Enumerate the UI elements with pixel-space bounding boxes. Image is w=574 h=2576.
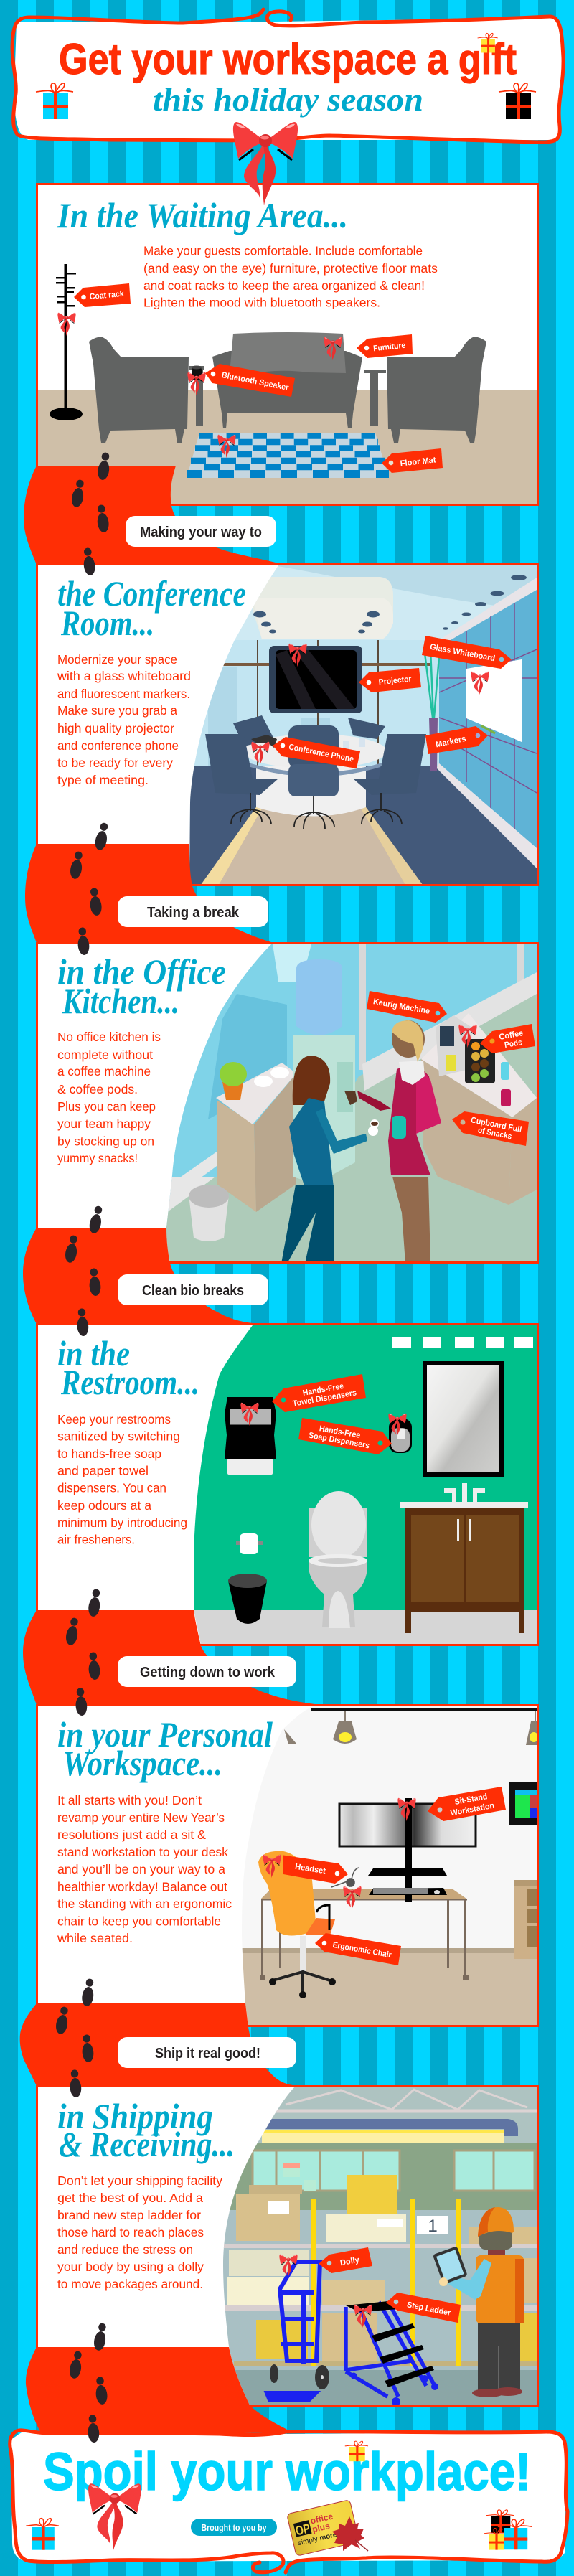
dolly wheels <box>270 2364 329 2389</box>
tag: markers: Markers <box>435 735 467 749</box>
text block: personal workspace: It all starts with you! Don’t <box>57 1793 202 1808</box>
aisle number sign <box>417 2216 448 2236</box>
heading: personal workspace <box>57 1714 273 1783</box>
label: taking a break: Taking a break <box>147 905 240 921</box>
icon: blue gift <box>26 2519 59 2550</box>
tag: sit-stand workstation <box>428 1787 506 1821</box>
heading: office kitchen: in the Office <box>57 951 226 992</box>
text block: shipping and receiving: get the best of you. Add a <box>57 2191 203 2205</box>
monitor <box>339 1804 476 1846</box>
illustration: office kitchen <box>165 943 538 1264</box>
soap dispenser <box>389 1419 412 1453</box>
tag: sit-stand workstation: Sit-Stand <box>454 1792 488 1807</box>
tag: cupboard full of snacks <box>452 1111 529 1146</box>
icon: bluetooth speaker <box>192 366 202 380</box>
label: getting down to work: Getting down to work <box>140 1665 276 1680</box>
tag: glass whiteboard <box>422 636 512 669</box>
pill: brought to you by <box>191 2519 277 2536</box>
side tables <box>189 366 386 426</box>
text block: personal workspace: the standing with an ergonomic <box>57 1896 232 1911</box>
text block: office kitchen: & coffee pods. <box>57 1082 138 1096</box>
icon: blue gift <box>36 83 73 119</box>
text block: shipping and receiving: those hard to reach places <box>57 2225 204 2239</box>
border: office kitchen <box>37 943 538 1263</box>
towel dispenser <box>225 1397 276 1475</box>
tag: dolly <box>319 2247 372 2273</box>
icon: right armchair <box>387 337 486 443</box>
text block: shipping and receiving: Don’t let your shipping facility <box>57 2173 222 2188</box>
text block: personal workspace: revamp your entire New Year’s <box>57 1810 225 1825</box>
heading: conference room: the Conference <box>57 573 246 614</box>
icon: yellow gift <box>345 2441 368 2461</box>
red path 2 <box>25 844 271 943</box>
wall tiles <box>392 1337 533 1348</box>
border: restroom <box>37 1325 538 1645</box>
text block: conference room <box>57 652 191 787</box>
text block: office kitchen: a coffee machine <box>57 1064 151 1078</box>
tag: headset <box>283 1856 348 1884</box>
text block: restroom: keep odours at a <box>57 1498 151 1513</box>
bows: conference room <box>251 644 489 765</box>
bottom banner <box>10 2430 568 2572</box>
text block: personal workspace: stand workstation to your desk <box>57 1845 228 1859</box>
tag: coat rack <box>74 283 131 307</box>
icon: sofa <box>212 332 362 428</box>
tag: bluetooth speaker <box>205 364 295 397</box>
text block: restroom: to hands-free soap <box>57 1447 161 1461</box>
dolly <box>267 2262 320 2400</box>
heading: shipping and receiving <box>57 2096 235 2164</box>
headset <box>331 1868 359 1887</box>
tag: glass whiteboard: Glass Whiteboard <box>429 643 496 663</box>
text block: personal workspace: resolutions just add a sit & <box>57 1828 206 1842</box>
side cabinet <box>514 1880 538 1959</box>
tag: keurig machine: Keurig Machine <box>372 997 430 1016</box>
worker <box>433 2207 524 2397</box>
vase and plant <box>425 649 439 771</box>
tag: step ladder: Step Ladder <box>406 2300 452 2318</box>
icon: big bow on banner <box>233 122 298 205</box>
red path 6 <box>26 2347 293 2436</box>
coffee machine and pods <box>436 1015 511 1106</box>
tag: cupboard full of snacks: Cupboard Full <box>470 1116 522 1134</box>
pill: brought to you by: Brought to you by <box>201 2522 267 2533</box>
heading: office kitchen <box>57 951 226 1021</box>
text block: restroom <box>57 1412 187 1547</box>
tag: towel dispensers <box>272 1374 366 1412</box>
panel: conference room <box>37 564 538 885</box>
water cooler <box>293 959 355 1184</box>
illustration: shipping and receiving <box>215 2087 538 2406</box>
heading: restroom: Restroom... <box>60 1362 199 1402</box>
bow on speaker <box>187 372 206 395</box>
vanity <box>400 1483 528 1633</box>
text block: waiting area: Make your guests comfortable. Include comfortable <box>144 244 423 258</box>
text block: restroom: and paper towel <box>57 1464 149 1478</box>
bin <box>189 1185 229 1241</box>
right counter <box>421 1013 537 1205</box>
red path 5 <box>20 2003 293 2086</box>
border: personal workspace <box>37 1705 538 2026</box>
icon: floor mat <box>187 433 389 478</box>
text block: waiting area <box>144 244 438 310</box>
text block: conference room: and fluorescent markers. <box>57 687 190 701</box>
panel: office kitchen <box>37 943 538 1264</box>
top banner <box>12 9 563 142</box>
red path 4 <box>23 1610 315 1705</box>
text block: office kitchen: your team happy <box>57 1117 151 1131</box>
tag: towel dispensers: Hands-Free <box>302 1382 344 1398</box>
pendant lamps <box>284 1721 538 1745</box>
label: making your way to <box>126 516 276 547</box>
text block: personal workspace: and you’ll be on your way to a <box>57 1862 225 1876</box>
tag: markers <box>425 726 488 754</box>
text block: restroom: sanitized by switching <box>57 1429 180 1444</box>
heading: personal workspace: in your Personal <box>57 1714 273 1754</box>
text block: shipping and receiving: and reduce the stress on <box>57 2242 193 2257</box>
text block: conference room: Modernize your space <box>57 652 177 667</box>
bow on coffee machine <box>458 1025 477 1048</box>
label: clean bio breaks: Clean bio breaks <box>142 1283 244 1299</box>
label: clean bio breaks <box>118 1274 268 1305</box>
tag: sit-stand workstation: Workstation <box>450 1802 495 1818</box>
red path 3 <box>23 1228 253 1324</box>
ceiling rail <box>311 1708 538 1721</box>
tag: coat rack: Coat rack <box>89 290 125 301</box>
icon: gift stack <box>484 2510 532 2550</box>
text block: office kitchen <box>57 1030 161 1165</box>
heading: waiting area: In the Waiting Area... <box>57 195 348 235</box>
text block: conference room: type of meeting. <box>57 773 149 787</box>
label: making your way to: Making your way to <box>140 525 262 540</box>
aisle number sign: 1 <box>428 2217 438 2236</box>
text block: office kitchen: Plus you can keep <box>57 1099 156 1114</box>
woman in teal <box>281 1056 379 1264</box>
tag: conference phone <box>273 737 360 768</box>
text block: office kitchen: by stocking up on <box>57 1134 154 1148</box>
icon: conference phone <box>251 735 277 748</box>
bows: shipping and receiving <box>279 2255 372 2328</box>
text block: office kitchen: complete without <box>57 1048 153 1062</box>
panel: waiting area <box>37 184 538 505</box>
tag: soap dispensers: Hands-Free <box>319 1424 361 1440</box>
text block: restroom: air fresheners. <box>57 1533 135 1547</box>
tag: headset: Headset <box>294 1863 326 1876</box>
text block: conference room: and conference phone <box>57 738 179 753</box>
tag: furniture: Furniture <box>373 342 406 353</box>
woman in red dress <box>344 1020 441 1264</box>
panel: shipping and receiving <box>37 2087 538 2406</box>
heading: restroom: in the <box>57 1333 130 1373</box>
chairs <box>205 715 426 796</box>
heading: personal workspace: Workspace... <box>62 1743 222 1783</box>
pallet line <box>234 2361 538 2366</box>
logo: office plus: plus <box>311 2521 331 2534</box>
tag: soap dispensers <box>298 1418 392 1454</box>
icon: big bow on bottom banner <box>88 2483 141 2550</box>
label: getting down to work <box>118 1656 296 1687</box>
tag: conference phone: Conference Phone <box>288 743 354 764</box>
text block: conference room: with a glass whiteboard <box>57 669 191 683</box>
logo: office plus: OP <box>294 2521 311 2538</box>
heading: shipping and receiving: in Shipping <box>57 2096 213 2136</box>
whiteboard <box>466 659 522 742</box>
footprints: trail <box>55 452 111 2443</box>
saucers <box>254 1067 289 1087</box>
tag: towel dispensers: Towel Dispensers <box>292 1388 357 1409</box>
text block: shipping and receiving: brand new step ladder for <box>57 2208 201 2222</box>
bow on mat <box>217 435 236 458</box>
border: shipping and receiving <box>37 2087 538 2405</box>
side wall <box>439 590 537 848</box>
bows: restroom <box>240 1403 407 1437</box>
ergonomic chair <box>258 1851 336 1998</box>
tag: coffee pods: Coffee <box>499 1029 524 1042</box>
text block: restroom: minimum by introducing <box>57 1515 187 1530</box>
toilet <box>309 1491 367 1628</box>
duct and light <box>262 2119 518 2143</box>
text block: shipping and receiving: to move packages around. <box>57 2277 203 2291</box>
panel: personal workspace <box>37 1705 538 2027</box>
text block: conference room: to be ready for every <box>57 756 173 770</box>
uprights <box>311 2199 461 2366</box>
text block: restroom: dispensers. You can <box>57 1481 166 1495</box>
icon: markers <box>481 725 495 733</box>
floor <box>187 766 537 885</box>
text block: personal workspace: chair to keep you comfortable <box>57 1914 221 1929</box>
heading: conference room <box>57 573 246 643</box>
logo: office plus <box>287 2500 368 2556</box>
icon: left armchair <box>89 337 189 443</box>
conference table <box>243 734 387 776</box>
illustration: restroom <box>187 1325 538 1646</box>
floor <box>165 1177 215 1220</box>
tag: ergonomic chair <box>315 1933 401 1965</box>
text block: personal workspace: healthier workday! Balance out <box>57 1880 227 1894</box>
sit-stand workstation <box>368 1798 447 1902</box>
bows: personal workspace <box>263 1798 416 1909</box>
text block: office kitchen: No office kitchen is <box>57 1030 161 1044</box>
label: taking a break <box>118 896 268 927</box>
text block: personal workspace <box>57 1793 232 1945</box>
text block: conference room: high quality projector <box>57 721 174 735</box>
red path 1 <box>24 466 278 565</box>
tag: coffee pods <box>480 1024 535 1053</box>
icon: black gift <box>499 83 536 119</box>
step ladder <box>346 2301 438 2406</box>
counter left <box>216 1063 296 1212</box>
logo: office plus: simply more <box>297 2531 338 2547</box>
text block: office kitchen: yummy snacks! <box>57 1151 138 1165</box>
logo: office plus: office <box>309 2511 334 2526</box>
text block: waiting area: and coat racks to keep the area organized & clean! <box>144 278 425 293</box>
tag: floor mat: Floor Mat <box>400 456 436 469</box>
illustration: personal workspace <box>237 1706 538 2027</box>
tag: projector <box>359 668 421 692</box>
tag: floor mat <box>382 448 443 473</box>
shelf boards <box>215 2244 538 2311</box>
ceiling light panel <box>253 577 393 639</box>
heading: office kitchen: Kitchen... <box>62 981 179 1021</box>
bow on sofa <box>324 337 342 360</box>
tag: dolly: Dolly <box>339 2256 360 2267</box>
tag: ergonomic chair: Ergonomic Chair <box>332 1941 392 1960</box>
wall picture <box>509 1782 538 1825</box>
icon: coat rack <box>50 264 83 420</box>
bow on coat rack <box>57 313 76 336</box>
plant <box>220 1062 247 1100</box>
mirror <box>423 1361 504 1477</box>
subtitle: this holiday season <box>153 81 423 118</box>
toilet paper <box>236 1533 263 1554</box>
tag: keurig machine <box>367 991 447 1023</box>
icon: yellow gift <box>478 33 498 52</box>
roof truss <box>215 2090 538 2111</box>
text block: shipping and receiving <box>57 2173 222 2291</box>
text block: personal workspace: while seated. <box>57 1931 133 1945</box>
windows <box>253 2150 535 2191</box>
illustration: conference room <box>179 565 538 885</box>
text block: waiting area: (and easy on the eye) furniture, protective floor mats <box>144 261 438 276</box>
heading: restroom <box>57 1333 199 1402</box>
wastebin <box>228 1574 267 1624</box>
ceiling lights <box>253 575 527 633</box>
floor <box>38 390 537 504</box>
boxes on shelves <box>227 2163 538 2361</box>
heading: shipping and receiving: & Receiving... <box>59 2124 235 2164</box>
screen <box>269 646 362 713</box>
heading: conference room: Room... <box>60 603 154 643</box>
text block: shipping and receiving: your body by using a dolly <box>57 2260 204 2274</box>
tag: projector: Projector <box>378 675 413 687</box>
text block: waiting area: Lighten the mood with bluetooth speakers. <box>144 296 380 310</box>
text block: conference room: Make sure you grab a <box>57 703 177 718</box>
panel: restroom <box>37 1325 538 1646</box>
tag: coffee pods: Pods <box>504 1038 523 1050</box>
label: ship it real good <box>118 2037 296 2068</box>
title: Get your workspace a gift <box>59 35 517 83</box>
tag: step ladder <box>386 2293 461 2323</box>
border: conference room <box>37 564 538 885</box>
tag: soap dispensers: Soap Dispensers <box>308 1432 370 1450</box>
desk <box>260 1889 469 1980</box>
tag: bluetooth speaker: Bluetooth Speaker <box>221 371 290 392</box>
label: ship it real good: Ship it real good! <box>155 2046 260 2062</box>
text block: restroom: Keep your restrooms <box>57 1412 171 1426</box>
tag: furniture <box>357 334 413 358</box>
tag: cupboard full of snacks: of Snacks <box>477 1127 512 1142</box>
